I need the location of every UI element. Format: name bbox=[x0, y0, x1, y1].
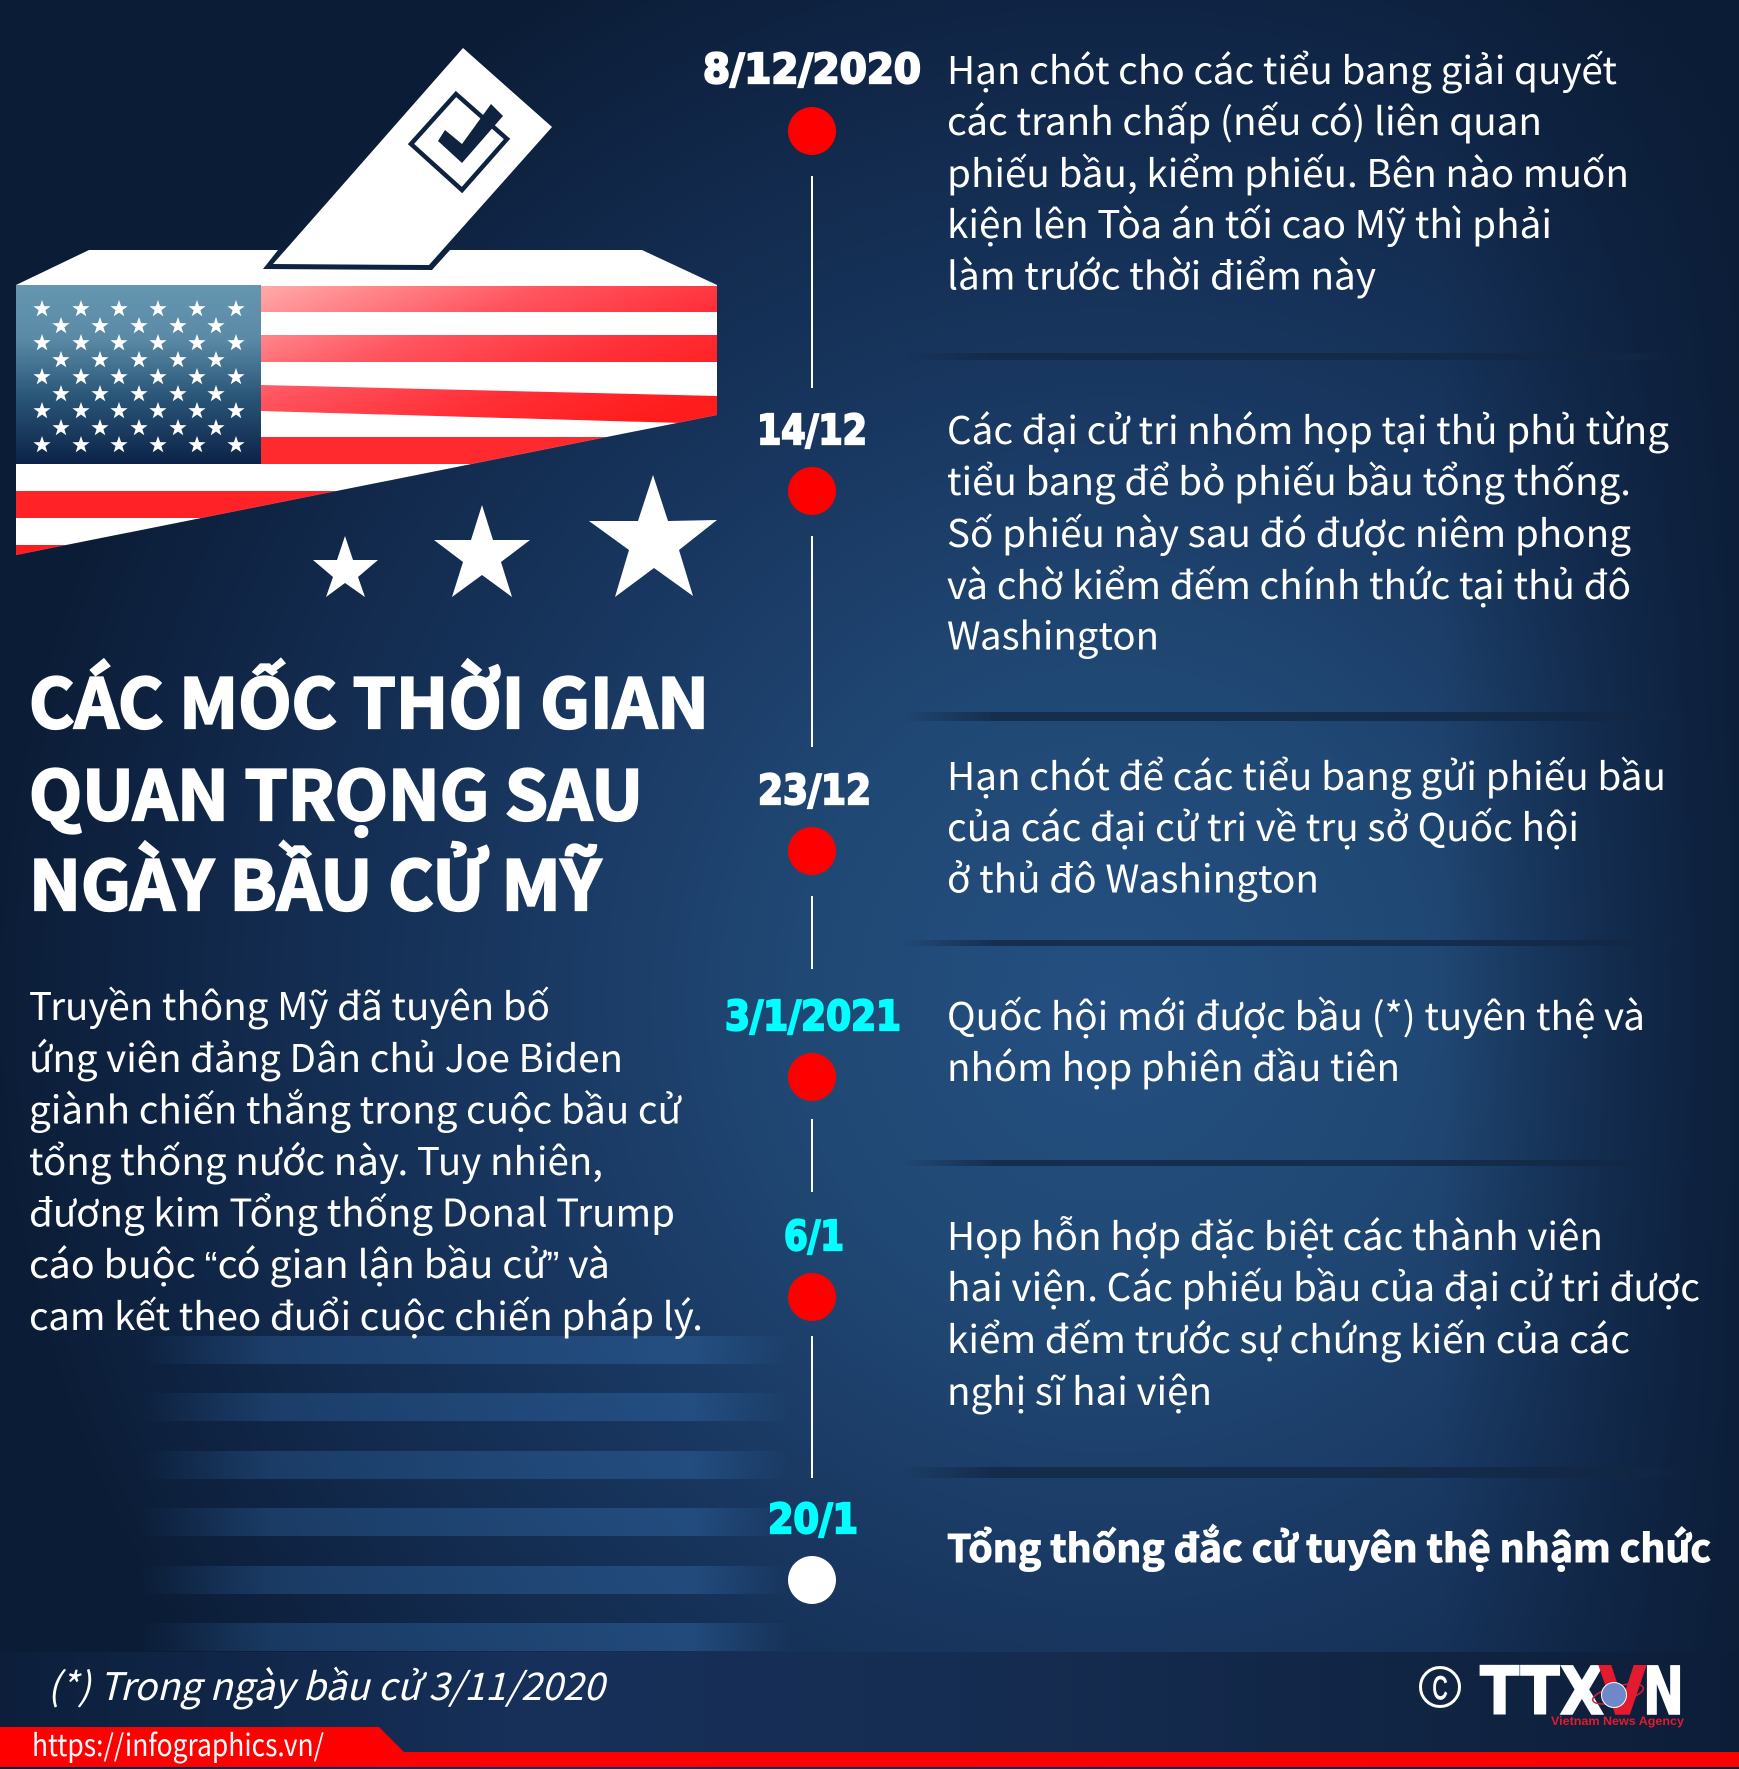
three stars bbox=[313, 475, 717, 597]
milestone: 14/12: Washington bbox=[947, 606, 1159, 660]
milestone: 8/12/2020: các tranh chấp (nếu có) liên quan bbox=[947, 91, 1542, 146]
TTXVN wordmark: N bbox=[1643, 1653, 1684, 1730]
website url: https://infographics.vn/ bbox=[32, 1721, 324, 1765]
milestone: 3/1/2021: 3/1/2021 bbox=[725, 992, 901, 1040]
milestone: 3/1/2021 bbox=[725, 986, 1645, 1101]
milestone: 6/1: nghị sĩ hai viện bbox=[947, 1361, 1212, 1416]
intro paragraph: ứng viên đảng Dân chủ Joe Biden bbox=[29, 1028, 623, 1083]
milestone: 23/12: 23/12 bbox=[758, 766, 871, 814]
decorative flag stripes lower left bbox=[140, 1336, 790, 1651]
TTXVN wordmark: TTX bbox=[1480, 1653, 1604, 1730]
title: QUAN TRỌNG SAU bbox=[29, 741, 643, 840]
right edge shade bbox=[1440, 0, 1739, 1769]
flag stripes bbox=[16, 285, 717, 565]
footer panel bbox=[0, 1652, 1739, 1769]
milestone: 14/12: tiểu bang để bỏ phiếu bầu tổng thống. bbox=[947, 451, 1631, 506]
intro paragraph bbox=[29, 976, 703, 1341]
milestone: 20/1 bbox=[768, 1495, 1711, 1604]
milestone: 8/12/2020: kiện lên Tòa án tối cao Mỹ thì phải bbox=[947, 194, 1552, 249]
milestone: 14/12: và chờ kiểm đếm chính thức tại thủ đô bbox=[947, 555, 1631, 610]
footnote: (*) Trong ngày bầu cử 3/11/2020 bbox=[48, 1656, 608, 1711]
milestone: 6/1: hai viện. Các phiếu bầu của đại cử tri được bbox=[947, 1257, 1700, 1312]
milestone: 8/12/2020 bbox=[703, 40, 1629, 300]
milestone: 23/12: của các đại cử tri về trụ sở Quốc hội bbox=[947, 797, 1579, 852]
milestone: 23/12: ở thủ đô Washington bbox=[947, 848, 1319, 904]
milestone: 14/12 bbox=[757, 400, 1669, 660]
red footer bar bbox=[0, 1727, 1739, 1767]
intro paragraph: Truyền thông Mỹ đã tuyên bố bbox=[29, 976, 550, 1031]
milestone: 14/12: 14/12 bbox=[757, 406, 867, 454]
intro paragraph: đương kim Tổng thống Donal Trump bbox=[29, 1182, 675, 1238]
TTXVN wordmark bbox=[1480, 1653, 1684, 1730]
milestone: 3/1/2021: nhóm họp phiên đầu tiên bbox=[947, 1037, 1400, 1092]
milestone: 8/12/2020: Hạn chót cho các tiểu bang giải quyết bbox=[947, 40, 1617, 95]
ballot checkbox bbox=[411, 94, 507, 190]
globe emblem bbox=[1591, 1680, 1645, 1708]
milestone: 8/12/2020: làm trước thời điểm này bbox=[947, 246, 1376, 300]
milestone: 23/12: Hạn chót để các tiểu bang gửi phiếu bầu bbox=[947, 746, 1666, 801]
copyright symbol bbox=[1420, 1668, 1460, 1706]
milestone: 6/1: Họp hỗn hợp đặc biệt các thành viên bbox=[947, 1206, 1603, 1261]
intro paragraph: cam kết theo đuổi cuộc chiến pháp lý. bbox=[29, 1286, 703, 1341]
copyright symbol: C bbox=[1432, 1670, 1448, 1706]
milestone: 6/1: kiểm đếm trước sự chứng kiến của các bbox=[947, 1309, 1630, 1364]
title bbox=[29, 649, 709, 930]
title: NGÀY BẦU CỬ MỸ bbox=[29, 831, 602, 930]
milestone: 3/1/2021: Quốc hội mới được bầu (*) tuyên thệ và bbox=[947, 986, 1645, 1041]
illustration: ballot box with US flag bbox=[16, 48, 717, 565]
milestone: 23/12 bbox=[758, 746, 1666, 904]
intro paragraph: giành chiến thắng trong cuộc bầu cử bbox=[29, 1080, 682, 1134]
milestone: 14/12: Các đại cử tri nhóm họp tại thủ phủ từng bbox=[947, 400, 1669, 455]
ballot paper bbox=[273, 48, 552, 265]
milestone: 20/1: 20/1 bbox=[768, 1495, 858, 1543]
separator bars bbox=[900, 353, 1690, 1478]
ballot slot bbox=[263, 250, 450, 270]
milestone: 6/1 bbox=[784, 1206, 1700, 1416]
milestone: 20/1: Tổng thống đắc cử tuyên thệ nhậm chức bbox=[947, 1518, 1711, 1573]
milestone: 8/12/2020: 8/12/2020 bbox=[703, 45, 921, 93]
milestone: 6/1: 6/1 bbox=[784, 1212, 844, 1260]
ballot box top bbox=[16, 250, 717, 285]
milestone: 14/12: Số phiếu này sau đó được niêm phong bbox=[947, 503, 1631, 558]
TTXVN wordmark: V bbox=[1599, 1653, 1646, 1730]
agency tagline: Vietnam News Agency bbox=[1551, 1714, 1684, 1728]
timeline connector lines bbox=[811, 176, 813, 1478]
intro paragraph: cáo buộc “có gian lận bầu cử ” và bbox=[29, 1234, 610, 1289]
logo: copyright and TTXVN bbox=[1420, 1653, 1684, 1730]
flag canton with stars bbox=[16, 285, 261, 464]
title: CÁC MỐC THỜI GIAN bbox=[29, 649, 709, 748]
intro paragraph: tổng thống nước này. Tuy nhiên, bbox=[29, 1131, 603, 1186]
milestone: 8/12/2020: phiếu bầu, kiểm phiếu. Bên nào muốn bbox=[947, 143, 1629, 198]
